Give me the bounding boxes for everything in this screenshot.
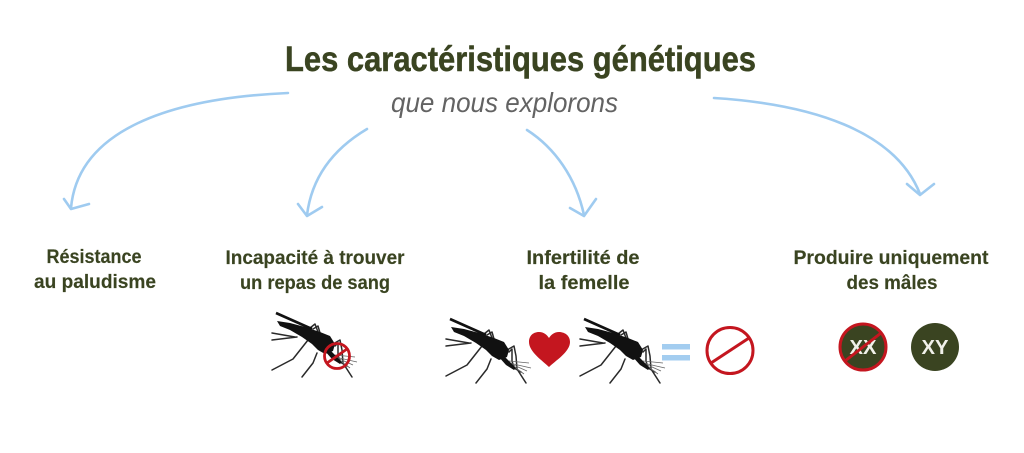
icon: XY: XY [922,337,949,359]
title: Les caractéristiques génétiques [285,40,756,79]
icon: XX crossed out [840,324,886,370]
arrow: to mâles [714,98,934,195]
subtitle: que nous explorons [391,87,618,118]
label: incapacité à trouver un repas de sang [226,248,405,294]
icon: mosquito left [446,319,531,383]
label: produire uniquement des mâles: Produire uniquement [794,248,989,269]
label: produire uniquement des mâles [794,248,989,294]
label: incapacité à trouver un repas de sang: un repas de sang [240,273,390,294]
icon: heart [529,332,570,367]
label: résistance au paludisme [34,247,156,293]
arrow: to résistance [64,93,288,209]
label: résistance au paludisme: au paludisme [34,272,156,293]
label: résistance au paludisme: Résistance [46,247,142,268]
arrow: to repas de sang [298,129,367,216]
icon: XY [911,323,959,371]
icon: mosquito right [580,319,665,383]
icon: equals sign [662,344,690,360]
label: infertilité de la femelle: la femelle [538,273,630,294]
icon: XX crossed out: XX [850,337,877,359]
icon: prohibition sign [707,328,753,374]
label: infertilité de la femelle [526,248,640,294]
label: incapacité à trouver un repas de sang: Incapacité à trouver [226,248,405,269]
arrow: to infertilité [527,130,596,216]
label: produire uniquement des mâles: des mâles [846,273,938,294]
icon: mosquito with prohibition sign [272,313,357,377]
label: infertilité de la femelle: Infertilité de [526,248,640,269]
